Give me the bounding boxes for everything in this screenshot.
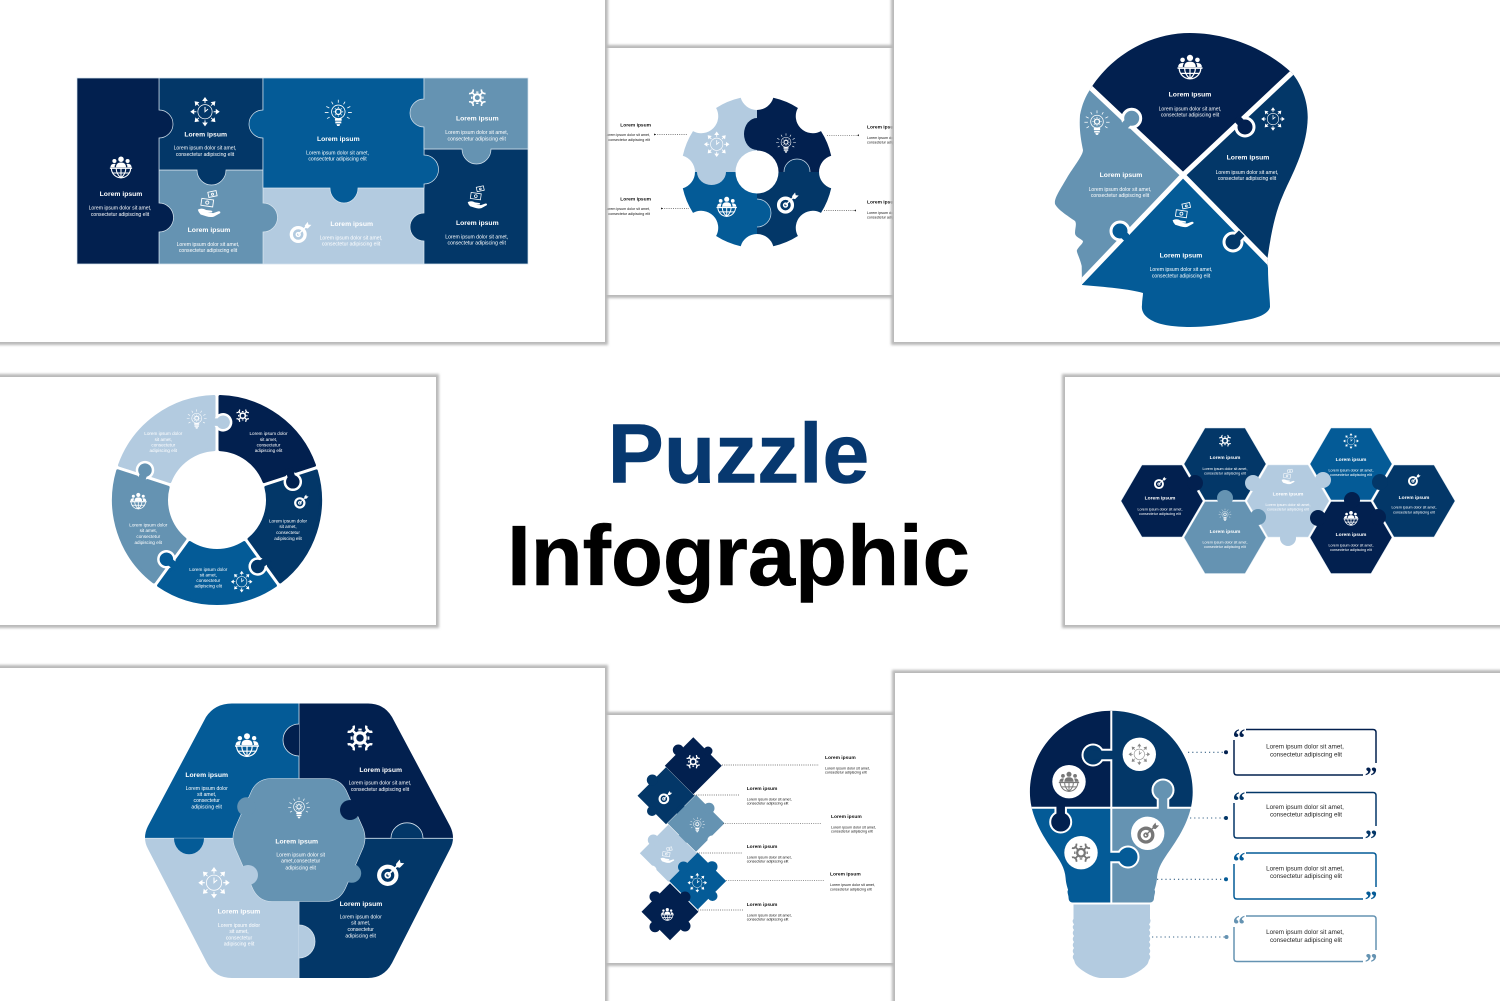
text: hex 7: Lorem ipsum	[1399, 495, 1430, 501]
panel: rounded hexagon puzzle slide	[0, 668, 605, 1001]
text: bottom right	[340, 901, 382, 940]
text: mid piece	[189, 567, 228, 588]
text: hex 2: consectetur adipiscing elit	[1204, 471, 1246, 475]
label 2	[747, 786, 792, 806]
icon: target	[779, 192, 799, 212]
text block G: Lorem ipsum	[456, 220, 499, 227]
label 3	[831, 814, 876, 834]
text block B: Lorem ipsum dolor sit amet,	[174, 146, 236, 152]
label 4: Lorem ipsum	[747, 844, 778, 850]
label 3: consectetur adipiscing elit	[831, 830, 873, 834]
text block C: Lorem ipsum dolor sit amet,	[177, 242, 239, 248]
quote box 1: Lorem ipsum dolor sit amet,	[1266, 744, 1344, 750]
head silhouette	[1054, 33, 1308, 327]
text block C: consectetur adipiscing elit	[179, 248, 238, 254]
label: upper left: consectetur adipiscing elit	[608, 138, 650, 142]
label: upper right	[867, 124, 912, 144]
quote box 3: ”	[1365, 887, 1377, 914]
label 5	[830, 872, 875, 891]
quote box 2: consectetur adipiscing elit	[1270, 812, 1342, 818]
text: centre: amet,consectetur	[281, 859, 321, 865]
icon: bulb	[776, 133, 796, 153]
label 1	[825, 755, 870, 775]
leader lines	[694, 765, 824, 910]
text block D	[306, 136, 369, 162]
label 1: Lorem ipsum dolor sit amet,	[825, 766, 870, 770]
text: mid piece: Lorem ipsum dolor	[189, 567, 228, 572]
text: light piece: consectetur	[151, 442, 176, 448]
icon: clock arrows	[1262, 108, 1284, 130]
quote box 1: consectetur adipiscing elit	[1270, 752, 1342, 758]
text block E: consectetur adipiscing elit	[322, 241, 381, 247]
label 2: Lorem ipsum	[747, 786, 778, 792]
title: Puzzle	[608, 406, 869, 500]
icon: people globe	[1178, 55, 1202, 79]
icon: clock arrows	[1344, 434, 1358, 448]
label: upper left	[605, 122, 652, 142]
quote box 4: ”	[1365, 950, 1377, 976]
panel: hexagon puzzle slide	[1065, 377, 1500, 625]
text: top right: Lorem ipsum dolor sit amet,	[349, 780, 411, 786]
icon: people globe	[130, 493, 147, 509]
text: top left: sit amet,	[197, 792, 216, 798]
panel: ring puzzle slide	[0, 375, 436, 641]
text: left: Lorem ipsum	[1100, 172, 1142, 179]
text block E: Lorem ipsum dolor sit amet,	[320, 235, 382, 241]
text: hex 6: Lorem ipsum	[1336, 532, 1367, 538]
icon: money hand	[1282, 469, 1294, 484]
text block B: consectetur adipiscing elit	[176, 152, 235, 158]
text: left: Lorem ipsum dolor sit amet,	[1089, 187, 1151, 193]
bulb glass puzzle	[1030, 710, 1193, 902]
text: centre	[275, 838, 326, 871]
text: steel piece	[129, 522, 168, 545]
text: hex 2: Lorem ipsum dolor sit amet,	[1203, 467, 1247, 471]
text block D: Lorem ipsum dolor sit amet,	[306, 150, 369, 156]
text: right: consectetur adipiscing elit	[1218, 176, 1277, 182]
text: bottom left: sit amet,	[229, 929, 249, 935]
text block A: consectetur adipiscing elit	[91, 212, 150, 218]
text: top left: consectetur	[194, 798, 220, 804]
icon: people globe	[661, 908, 674, 920]
title: Infographic	[507, 509, 970, 604]
text: hex 3	[1203, 529, 1247, 549]
label 2: consectetur adipiscing elit	[747, 802, 788, 806]
text block C	[177, 227, 239, 254]
text block G: Lorem ipsum dolor sit amet,	[445, 234, 508, 240]
text: navy piece: consectetur	[257, 442, 281, 448]
text: hex 1	[1138, 496, 1182, 516]
panel: diagonal puzzle slide	[606, 715, 894, 963]
text block A: Lorem ipsum dolor sit amet,	[89, 205, 151, 211]
text block G: consectetur adipiscing elit	[448, 240, 506, 246]
text: top: Lorem ipsum	[1169, 92, 1211, 98]
text: top right: Lorem ipsum	[359, 767, 402, 774]
label: upper left: Lorem ipsum	[620, 122, 652, 128]
text: bottom	[1150, 252, 1212, 280]
label 3: Lorem ipsum dolor sit amet,	[831, 825, 876, 829]
text block B	[174, 132, 236, 158]
icon badge: clock arrows	[1123, 738, 1156, 771]
text: hex 6	[1329, 532, 1373, 552]
text: hex 1: consectetur adipiscing elit	[1139, 512, 1181, 516]
icon: clock arrows	[705, 132, 729, 156]
quote box 2: ”	[1365, 826, 1377, 853]
label 4: consectetur adipiscing elit	[747, 860, 788, 864]
text block E: Lorem ipsum	[330, 221, 373, 228]
label 6: Lorem ipsum dolor sit amet,	[747, 913, 792, 917]
text: light piece: adipiscing elit	[150, 448, 178, 453]
hexagon pieces	[140, 700, 459, 980]
quote box 4: consectetur adipiscing elit	[1270, 937, 1342, 944]
label: upper left: Lorem ipsum dolor sit amet,	[605, 133, 650, 137]
text: top left: Lorem ipsum	[185, 772, 228, 779]
text: left: consectetur adipiscing elit	[1091, 193, 1150, 199]
label 5: Lorem ipsum	[830, 872, 861, 878]
icon: clock arrows	[199, 868, 229, 898]
leader lines	[654, 134, 859, 212]
quote box 1: ”	[1365, 763, 1377, 790]
text: dark piece	[269, 518, 307, 541]
icon: people globe	[235, 733, 259, 756]
text: mid piece: consectetur	[196, 578, 221, 583]
text block C: Lorem ipsum	[188, 227, 230, 234]
icon badge: people globe	[1052, 765, 1086, 798]
icon: money hand	[468, 186, 487, 208]
text block F: consectetur adipiscing elit	[448, 136, 506, 142]
label 4	[747, 844, 792, 864]
text block F: Lorem ipsum	[456, 116, 499, 122]
icon: gear	[1219, 435, 1231, 446]
text: hex 4: Lorem ipsum dolor sit amet,	[1266, 503, 1310, 507]
text: hex 7: Lorem ipsum dolor sit amet,	[1392, 506, 1436, 510]
text block D: consectetur adipiscing elit	[308, 156, 367, 162]
label 5: Lorem ipsum dolor sit amet,	[830, 883, 875, 887]
text: top left: adipiscing elit	[191, 804, 223, 810]
icon: target	[295, 494, 309, 508]
leader lines	[1152, 750, 1228, 939]
label: lower left: Lorem ipsum dolor sit amet,	[605, 207, 650, 211]
bulb screw base	[1073, 904, 1151, 978]
text: hex 1: Lorem ipsum dolor sit amet,	[1138, 508, 1182, 512]
text: bottom left: Lorem ipsum dolor	[218, 923, 260, 929]
text: hex 5	[1329, 457, 1373, 477]
panel: rectangular puzzle slide	[0, 0, 605, 342]
text: centre: adipiscing elit	[285, 865, 317, 871]
quote box 4: “	[1233, 912, 1245, 938]
icon: target	[660, 791, 672, 803]
centre piece	[233, 778, 365, 902]
quote box 3	[1233, 848, 1377, 914]
hex pieces	[1121, 428, 1455, 574]
text: centre: Lorem ipsum dolor sit	[276, 852, 326, 858]
label 2: Lorem ipsum dolor sit amet,	[747, 797, 792, 801]
text: hex 7	[1392, 495, 1436, 515]
icon: bulb	[288, 797, 310, 818]
icon: clock arrows	[232, 572, 252, 592]
text: mid piece: adipiscing elit	[195, 584, 223, 588]
text: hex 2	[1203, 455, 1247, 475]
panel: light bulb puzzle slide	[895, 673, 1500, 1001]
quote box 3: “	[1233, 848, 1245, 876]
text: navy piece: sit amet,	[260, 437, 277, 442]
panel: head puzzle slide	[894, 0, 1500, 345]
text: hex 5: Lorem ipsum	[1336, 457, 1367, 463]
label 1: consectetur adipiscing elit	[825, 771, 867, 775]
quote box 4	[1233, 912, 1377, 976]
text: top: Lorem ipsum dolor sit amet,	[1159, 106, 1221, 112]
text: dark piece: consectetur	[276, 530, 300, 535]
text: bottom: consectetur adipiscing elit	[1152, 274, 1211, 280]
label: lower left: consectetur adipiscing elit	[608, 212, 650, 216]
puzzle pieces	[638, 737, 726, 940]
text: light piece	[144, 431, 183, 453]
icon: money hand	[660, 847, 674, 863]
text: hex 3: consectetur adipiscing elit	[1204, 545, 1246, 549]
text: light piece: sit amet,	[155, 437, 172, 442]
icon: gear	[237, 410, 249, 422]
text: top right	[349, 767, 411, 793]
text: hex 3: Lorem ipsum	[1210, 529, 1241, 535]
text: steel piece: consectetur	[136, 534, 161, 539]
text: light piece: Lorem ipsum dolor	[144, 431, 183, 436]
text: hex 4: consectetur adipiscing elit	[1267, 507, 1309, 511]
icon badge: target	[1131, 817, 1164, 850]
text block A	[89, 191, 151, 218]
label 6: Lorem ipsum	[747, 902, 778, 908]
icon: target	[291, 222, 311, 241]
quote box 2: “	[1233, 788, 1245, 815]
icon: gear	[687, 755, 700, 768]
quote box 2	[1233, 788, 1377, 853]
text: hex 4: Lorem ipsum	[1273, 492, 1304, 498]
text: right: Lorem ipsum dolor sit amet,	[1216, 170, 1278, 176]
text: bottom right: Lorem ipsum	[340, 901, 382, 908]
text: hex 3: Lorem ipsum dolor sit amet,	[1203, 541, 1247, 545]
label: lower left: Lorem ipsum	[620, 196, 652, 202]
text: dark piece: Lorem ipsum dolor	[269, 518, 307, 524]
quote box 4: Lorem ipsum dolor sit amet,	[1266, 929, 1344, 936]
label 1: Lorem ipsum	[825, 755, 856, 761]
label: lower left	[605, 196, 652, 216]
icon: target	[379, 860, 404, 884]
text: steel piece: Lorem ipsum dolor	[129, 522, 168, 528]
icon: bulb	[1084, 110, 1110, 135]
icon: money hand	[1173, 203, 1194, 227]
quote box 1: “	[1233, 725, 1245, 752]
text: bottom left: Lorem ipsum	[218, 908, 260, 916]
text: hex 7: consectetur adipiscing elit	[1393, 511, 1435, 515]
quote box 2: Lorem ipsum dolor sit amet,	[1266, 804, 1344, 811]
text: hex 5: consectetur adipiscing elit	[1330, 473, 1372, 477]
text: bottom left	[218, 908, 260, 947]
text: right	[1216, 154, 1278, 182]
text: top left: Lorem ipsum dolor	[186, 786, 228, 792]
text block F	[445, 116, 508, 142]
text: dark piece: adipiscing elit	[274, 536, 303, 541]
title	[507, 406, 970, 604]
text: steel piece: adipiscing elit	[135, 540, 163, 545]
icon: people globe	[110, 156, 132, 178]
label: upper right: Lorem ipsum dolor sit amet,	[867, 136, 912, 140]
icon: bulb	[690, 817, 705, 832]
text block A: Lorem ipsum	[100, 191, 142, 198]
gear centre hole	[736, 150, 778, 194]
icon: bulb	[1219, 509, 1231, 521]
label 6: consectetur adipiscing elit	[747, 918, 788, 922]
label: lower right: consectetur adipiscing elit	[867, 216, 909, 220]
text: top left	[185, 772, 228, 810]
gear puzzle	[682, 98, 832, 246]
icon: clock arrows	[688, 873, 707, 892]
icon: gear	[348, 726, 372, 750]
ring pieces	[77, 375, 346, 641]
label: upper right: consectetur adipiscing elit	[867, 140, 909, 144]
text: hex 5: Lorem ipsum dolor sit amet,	[1329, 469, 1373, 473]
puzzle pieces	[77, 78, 528, 264]
text: mid piece: sit amet,	[200, 572, 217, 578]
panel: gear puzzle slide	[605, 48, 912, 295]
icon: target	[1409, 474, 1421, 485]
text: hex 1: Lorem ipsum	[1145, 496, 1176, 502]
text: bottom: Lorem ipsum	[1160, 252, 1202, 260]
text: top	[1159, 92, 1221, 119]
text: bottom right: Lorem ipsum dolor	[340, 914, 382, 920]
text: hex 6: Lorem ipsum dolor sit amet,	[1329, 544, 1373, 548]
text: right: Lorem ipsum	[1227, 154, 1269, 162]
label: lower right	[867, 200, 912, 220]
label 4: Lorem ipsum dolor sit amet,	[747, 855, 792, 859]
label 6	[747, 902, 792, 922]
text: navy piece	[249, 431, 288, 453]
quote box 3: Lorem ipsum dolor sit amet,	[1266, 866, 1344, 872]
text: bottom: Lorem ipsum dolor sit amet,	[1150, 267, 1212, 273]
text: hex 4	[1266, 492, 1310, 511]
text: top: consectetur adipiscing elit	[1161, 113, 1220, 119]
text: navy piece: adipiscing elit	[255, 448, 283, 453]
text: left	[1089, 172, 1151, 199]
label 3: Lorem ipsum	[831, 814, 862, 820]
text block F: Lorem ipsum dolor sit amet,	[445, 130, 508, 136]
icon: money hand	[198, 191, 220, 217]
text: bottom left: adipiscing elit	[224, 941, 255, 947]
text: bottom right: adipiscing elit	[345, 934, 377, 940]
icon: people globe	[1344, 511, 1358, 525]
label: lower right: Lorem ipsum	[867, 200, 898, 206]
label: lower right: Lorem ipsum dolor sit amet,	[867, 211, 912, 215]
icon: bulb	[325, 100, 352, 126]
text: hex 6: consectetur adipiscing elit	[1330, 548, 1372, 552]
quote box 1	[1233, 725, 1377, 790]
text block G	[445, 220, 508, 246]
quote box 3: consectetur adipiscing elit	[1270, 873, 1342, 880]
text: steel piece: sit amet,	[140, 528, 157, 533]
icon badge: gear	[1064, 836, 1098, 869]
icon: target	[1155, 477, 1167, 488]
text: top right: consectetur adipiscing elit	[351, 787, 410, 793]
text: bottom right: consectetur	[348, 927, 374, 933]
label 5: consectetur adipiscing elit	[830, 887, 872, 891]
label: upper right: Lorem ipsum	[867, 124, 898, 130]
text block D: Lorem ipsum	[317, 136, 360, 143]
icon: people globe	[717, 197, 737, 216]
text: centre: Lorem ipsum	[275, 838, 318, 846]
text: bottom left: consectetur	[226, 935, 252, 941]
icon: gear	[469, 89, 486, 106]
icon: bulb	[187, 409, 207, 429]
text: dark piece: sit amet,	[279, 524, 297, 529]
icon: clock arrows	[191, 98, 219, 126]
text: bottom right: sit amet,	[351, 921, 370, 927]
text block E	[320, 221, 382, 247]
text block B: Lorem ipsum	[184, 132, 227, 138]
text: navy piece: Lorem ipsum dolor	[249, 431, 288, 436]
text: hex 2: Lorem ipsum	[1210, 455, 1241, 461]
